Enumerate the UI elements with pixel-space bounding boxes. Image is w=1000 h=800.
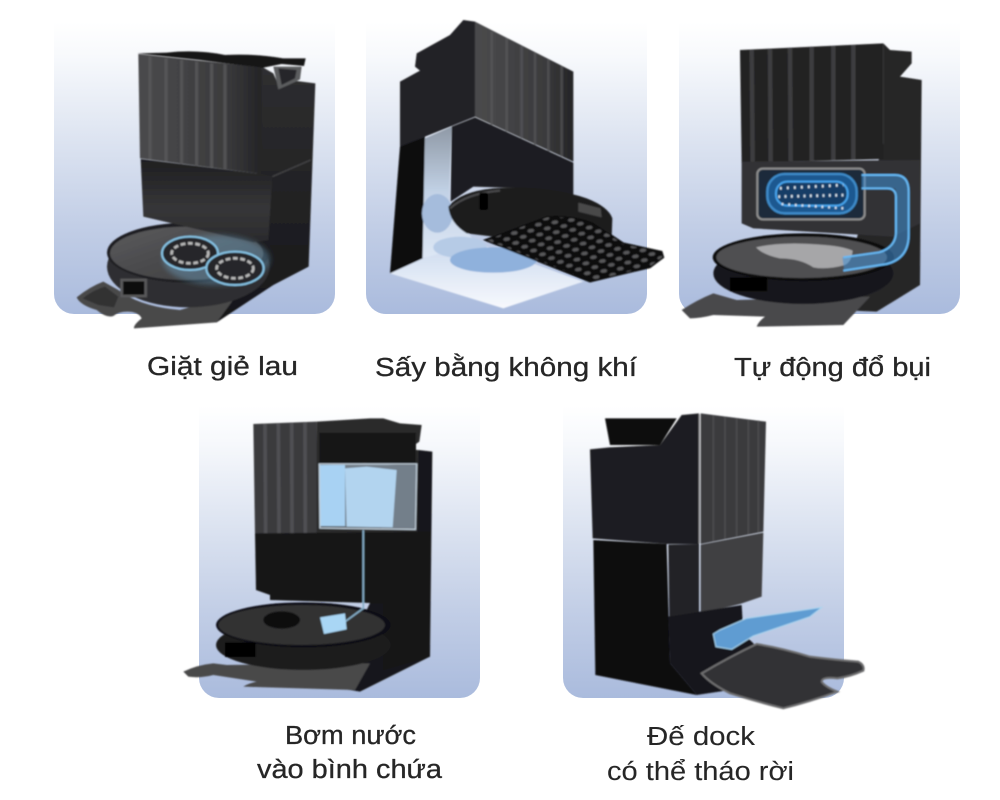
hex mesh tray [485,216,663,282]
robot [713,233,894,304]
robot [107,223,270,307]
cleaning pads [422,194,537,273]
robot [448,188,612,240]
product: water pumping station [183,418,432,692]
blue air tube [843,175,909,271]
label: water: Bơm nước [285,722,416,750]
product: air drying station [390,20,663,308]
dock tray [702,644,864,708]
robot [216,602,391,670]
label: water [257,722,443,784]
panel: dust background [679,22,960,314]
transparent dust bin [757,169,865,219]
label: dock [607,723,794,786]
label: wash: Giặt giẻ lau [147,353,298,381]
panel: wash background [54,22,335,314]
panel: dock background [563,406,844,698]
water pipe and reservoir [320,530,363,634]
blue mop plate [713,607,822,649]
product: mop washing station [77,51,315,328]
water tank [319,463,417,529]
product: auto dust emptying station [682,43,922,327]
label: dock: Đế dock [647,723,755,751]
label: dry: Sấy bằng không khí [375,353,637,382]
panel: dry background [366,22,647,314]
mop pads [162,237,264,285]
label: dock: có thể tháo rời [607,758,794,786]
label: water: vào bình chứa [257,756,443,784]
panel: water background [199,406,480,698]
tray [183,663,370,690]
tray [77,282,242,328]
product: removable dock base [590,413,864,708]
tray [682,293,870,327]
label: dust: Tự động đổ bụi [734,354,931,382]
